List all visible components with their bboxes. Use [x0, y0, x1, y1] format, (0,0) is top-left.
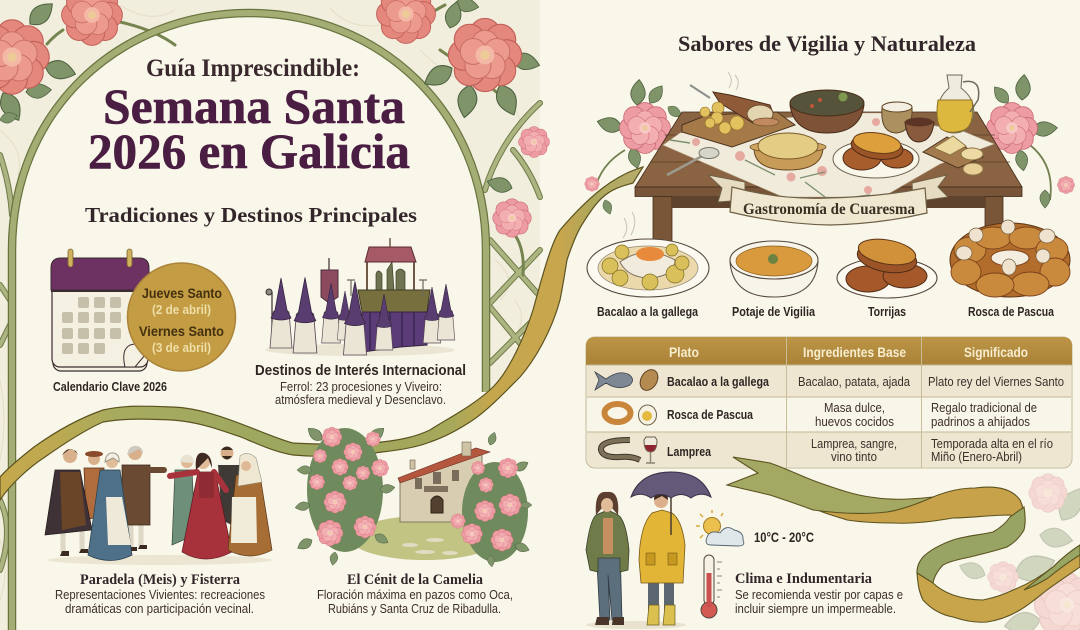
calendar icon: [51, 249, 149, 371]
dish labels: [597, 304, 1055, 319]
table row: lamprea: Lamprea: [667, 444, 712, 459]
camelia text: Floración máxima en pazos como Oca,: [317, 587, 513, 602]
floral sprigs beside table: [585, 74, 1075, 216]
table row: bacalao: Bacalao a la gallega: [667, 374, 770, 389]
Paradela text: Paradela (Meis) y Fisterra: [80, 572, 240, 588]
table row: rosca: Rosca de Pascua: [667, 407, 754, 422]
table row: bacalao: Bacalao, patata, ajada: [798, 374, 911, 389]
dish labels: Torrijas: [868, 304, 906, 319]
date badge: (3 de abril): [152, 340, 211, 355]
table panel: [586, 337, 1072, 468]
camelia text: [317, 572, 513, 616]
faded camellias bottom right: [957, 474, 1080, 630]
clima text: Clima e Indumentaria: [735, 571, 872, 587]
Paradela text: dramáticas con participación vecinal.: [65, 601, 254, 616]
camellias: top border: [0, 0, 550, 237]
table header: Ingredientes Base: [803, 345, 906, 360]
icon: sun and cloud: [696, 510, 744, 546]
camelia text: Rubiáns y Santa Cruz de Ribadulla.: [328, 601, 501, 616]
table row: lamprea: [601, 436, 1053, 464]
title: Guía Imprescindible:: [146, 55, 360, 82]
ribbon: left sweeping: [0, 167, 643, 500]
figures: Paradela representation: [45, 446, 272, 565]
table header: Plato: [669, 345, 699, 360]
destinos text: [255, 363, 466, 407]
table row: rosca: Masa dulce,: [824, 400, 885, 415]
date badge: Viernes Santo: [139, 323, 224, 339]
destinos text: Destinos de Interés Internacional: [255, 363, 466, 379]
title: [88, 55, 410, 179]
table row: rosca: [604, 400, 1037, 429]
table header: Significado: [964, 345, 1028, 360]
table row: lamprea: Temporada alta en el río: [931, 436, 1053, 451]
destinos text: atmósfera medieval y Desenclavo.: [275, 392, 446, 407]
left panel background: [0, 0, 540, 630]
table row: rosca: Regalo tradicional de: [931, 400, 1037, 415]
dish labels: Potaje de Vigilia: [732, 304, 816, 319]
destinos text: Ferrol: 23 procesiones y Viveiro:: [280, 379, 442, 394]
title: 2026 en Galicia: [88, 123, 410, 179]
Paradela text: [55, 572, 265, 616]
right panel background: [540, 0, 1080, 630]
clima text: Se recomienda vestir por capas e: [735, 587, 903, 602]
table row: lamprea: Lamprea, sangre,: [811, 436, 897, 451]
dish labels: Rosca de Pascua: [968, 304, 1055, 319]
Paradela text: Representaciones Vivientes: recreaciones: [55, 587, 265, 602]
table dishes: [623, 72, 983, 238]
table row: bacalao: [595, 366, 1064, 394]
clima text: incluir siempre un impermeable.: [735, 601, 896, 616]
dish: bacalao: [587, 239, 709, 297]
ribbon: right flowing: [727, 457, 1080, 622]
camellia garden and pazo: [294, 425, 532, 567]
date badge: (2 de abril): [152, 302, 211, 317]
banner: Gastronomía de Cuaresma: [708, 175, 948, 225]
title: Semana Santa: [103, 78, 405, 134]
dish: potaje: [730, 241, 818, 297]
clima text: [735, 571, 903, 616]
icon: thermometer: [701, 555, 722, 618]
table row: rosca: padrinos a ahijados: [931, 414, 1030, 429]
date badge: [128, 263, 236, 371]
dish: rosca de pascua: [950, 220, 1070, 297]
background leaf pattern: [0, 5, 523, 600]
arch interior: [12, 13, 540, 630]
camelia text: El Cénit de la Camelia: [347, 572, 483, 588]
arch frame: [12, 13, 486, 630]
heading: sabores: Sabores de Vigilia y Naturaleza: [678, 31, 976, 56]
procession illustration: [265, 238, 455, 356]
table row: lamprea: Miño (Enero-Abril): [931, 449, 1022, 464]
couple in rain gear: [586, 472, 711, 629]
dish: torrijas: [837, 235, 937, 298]
table row: lamprea: vino tinto: [831, 449, 877, 464]
table row: rosca: huevos cocidos: [815, 414, 894, 429]
table header: [669, 345, 1028, 360]
table: [635, 112, 1022, 242]
lattice right: [0, 5, 540, 570]
dish labels: Bacalao a la gallega: [597, 304, 699, 319]
temperature: 10°C - 20°C: [754, 530, 814, 545]
date badge: Jueves Santo: [142, 285, 222, 301]
subtitle: Tradiciones y Destinos Principales: [85, 203, 417, 227]
banner: Gastronomía de Cuaresma: Gastronomía de Cuaresma: [743, 201, 915, 218]
calendar caption: Calendario Clave 2026: [53, 380, 167, 394]
